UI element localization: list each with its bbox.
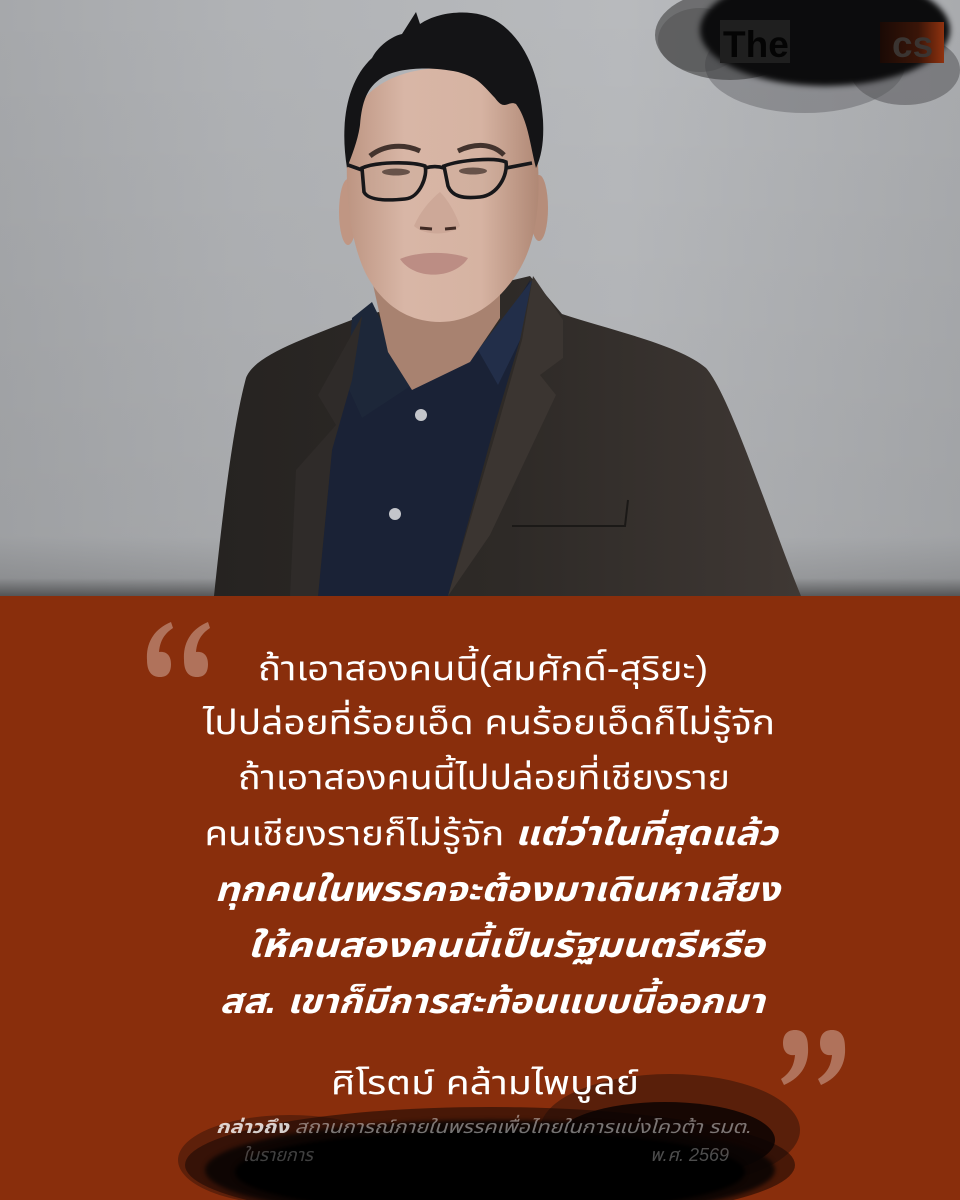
quote text: คนเชียงรายก็ไม่รู้จัก แต่ว่าในที่สุดแล้ว xyxy=(204,809,779,854)
icon: opening quote mark xyxy=(147,622,210,677)
mouth xyxy=(400,253,468,275)
icon: closing quote mark xyxy=(781,1030,845,1085)
quote text xyxy=(202,645,782,1021)
source caption: ในรายการ xyxy=(243,1145,314,1165)
lapels xyxy=(290,316,362,596)
hair xyxy=(344,12,543,168)
red-brown quote panel xyxy=(0,596,960,1200)
quote text: ให้คนสองคนนี้เป็นรัฐมนตรีหรือ xyxy=(248,921,767,965)
nose xyxy=(414,192,460,234)
quote text: ถ้าเอาสองคนนี้(สมศักดิ์-สุริยะ) xyxy=(258,645,708,689)
source caption: กล่าวถึง สถานการณ์ภายในพรรคเพื่อไทยในการแบ่งโควต้า รมต. xyxy=(216,1114,752,1137)
logo text remnant: The xyxy=(723,24,789,65)
source caption xyxy=(216,1114,752,1165)
eyes xyxy=(382,168,410,176)
logo scribble censor: cs xyxy=(892,24,933,65)
quote text: ถ้าเอาสองคนนี้ไปปล่อยที่เชียงราย xyxy=(238,754,730,797)
logo scribble censor xyxy=(655,0,960,113)
speaker name: ศิโรตม์ คล้ามไพบูลย์ xyxy=(331,1064,639,1103)
eyebrows xyxy=(370,146,420,156)
neck xyxy=(372,270,500,390)
shirt buttons xyxy=(415,409,427,421)
ears xyxy=(339,179,357,245)
jacket xyxy=(214,276,801,596)
glasses xyxy=(348,159,532,200)
source caption: พ.ศ. 2569 xyxy=(650,1145,729,1165)
portrait of the speaker xyxy=(214,12,801,596)
quote text: ทุกคนในพรรคจะต้องมาเดินหาเสียง xyxy=(214,871,782,910)
quote text: สส. เขาก็มีการสะท้อนแบบนี้ออกมา xyxy=(220,977,767,1021)
shirt xyxy=(318,280,530,596)
quote text: ไปปล่อยที่ร้อยเอ็ด คนร้อยเอ็ดก็ไม่รู้จัก xyxy=(202,699,775,743)
photo background xyxy=(0,0,960,596)
jacket pocket xyxy=(512,500,628,526)
bottom scribble censor xyxy=(178,1074,800,1200)
face xyxy=(347,68,539,322)
